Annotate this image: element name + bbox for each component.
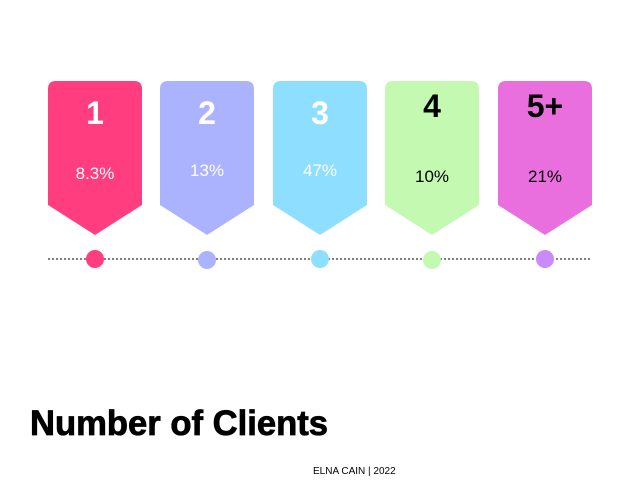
card 4: 10% xyxy=(415,167,449,186)
card 4 xyxy=(385,81,479,235)
timeline dotted line xyxy=(48,258,590,260)
card 5: 21% xyxy=(528,167,562,186)
card 3: 47% xyxy=(303,161,337,180)
card 5: 5+ xyxy=(527,88,563,124)
card 2: 2 xyxy=(198,95,216,131)
card 4: 4 xyxy=(423,88,441,124)
card 2 xyxy=(160,81,254,235)
title: Number of Clients xyxy=(30,404,328,443)
card 5 xyxy=(498,81,592,235)
card 3 xyxy=(273,81,367,235)
card 1: 8.3% xyxy=(76,164,114,183)
card 2: 13% xyxy=(190,161,224,180)
card 1 xyxy=(48,81,142,235)
timeline dots xyxy=(86,250,554,269)
footer credit: ELNA CAIN | 2022 xyxy=(313,466,396,477)
card 3: 3 xyxy=(311,95,329,131)
card 1: 1 xyxy=(86,95,104,131)
